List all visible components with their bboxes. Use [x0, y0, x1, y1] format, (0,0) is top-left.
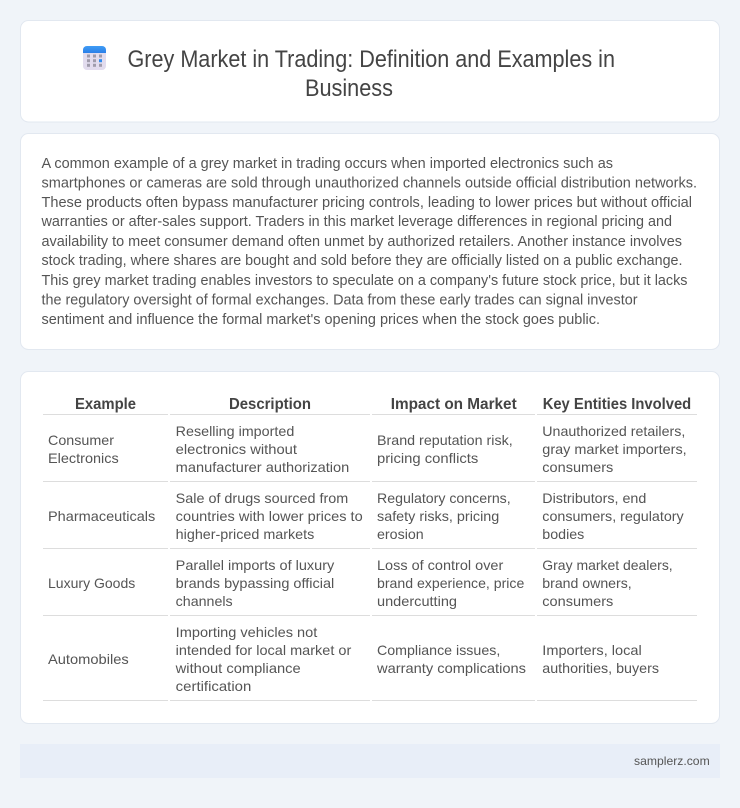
table row: luxury goods: Luxury Goods	[48, 575, 135, 591]
text block: description paragraph: smartphones or cameras are sold through unauthorized channels outside official distribution networks.	[42, 176, 697, 192]
table row: automobiles: Importers, local	[542, 642, 642, 658]
table row: luxury goods	[43, 557, 697, 616]
text block: description paragraph: stock trading, where shares are bought and sold before they are officially listed on a public exchange.	[42, 253, 682, 269]
table row: pharmaceuticals: higher-priced markets	[176, 526, 314, 542]
text block: description paragraph: warranties or after-sales support. Traders in this market leverage differences in regional pricing and	[41, 214, 672, 230]
table row: pharmaceuticals: Regulatory concerns,	[377, 490, 511, 506]
table row: automobiles: warranty complications	[376, 660, 526, 676]
table header row: Example	[75, 396, 136, 413]
table row: luxury goods: consumers	[542, 593, 613, 609]
table row: consumer electronics: electronics without	[176, 441, 297, 457]
table row: luxury goods: channels	[176, 593, 233, 609]
table row: consumer electronics: Reselling imported	[176, 423, 294, 439]
table row: pharmaceuticals: erosion	[377, 526, 424, 542]
table row: luxury goods: Parallel imports of luxury	[176, 557, 334, 573]
text block: description paragraph: sentiment and influence the formal market's opening prices when the stock goes public.	[42, 312, 600, 328]
table row: automobiles: Automobiles	[48, 651, 129, 667]
title: Business	[305, 75, 393, 102]
text block: description paragraph: availability to meet consumer demand often unmet by authorized retailers. Another instance involves	[42, 234, 682, 250]
table row: pharmaceuticals: consumers, regulatory	[542, 508, 684, 524]
table row: luxury goods: brands bypassing official	[176, 575, 334, 591]
table row: consumer electronics: Electronics	[48, 450, 119, 466]
table row: luxury goods: Gray market dealers,	[542, 557, 673, 573]
table header row	[43, 396, 697, 415]
table row: pharmaceuticals	[43, 490, 697, 549]
table row: consumer electronics: Brand reputation risk,	[377, 432, 513, 448]
table row: pharmaceuticals: bodies	[542, 526, 584, 542]
title: Grey Market in Trading: Definition and Examples in	[128, 46, 615, 73]
table row: automobiles: certification	[176, 678, 251, 694]
footer source text: samplerz.com	[634, 754, 710, 768]
panel: description	[20, 134, 720, 350]
table row: pharmaceuticals: Distributors, end	[542, 490, 646, 506]
text block: description paragraph: A common example of a grey market in trading occurs when imported electronics such as	[42, 156, 613, 172]
table row: automobiles: Importing vehicles not	[176, 624, 317, 640]
table row: luxury goods: undercutting	[377, 593, 457, 609]
table row: automobiles: intended for local market or	[176, 642, 352, 658]
table row: luxury goods: brand experience, price	[377, 575, 525, 591]
table row: pharmaceuticals: Pharmaceuticals	[48, 508, 155, 524]
table row: pharmaceuticals: safety risks, pricing	[377, 508, 499, 524]
panel: header	[20, 20, 720, 122]
table row: luxury goods: brand owners,	[542, 575, 632, 591]
icon: calendar	[83, 46, 106, 70]
table row: consumer electronics: gray market importers,	[542, 441, 687, 457]
text block: description paragraph: These products often bypass manufacturer pricing controls, leading to lower prices but without official	[42, 195, 692, 211]
table row: consumer electronics: Consumer	[48, 432, 114, 448]
table row: consumer electronics: manufacturer authorization	[176, 459, 349, 475]
table row: pharmaceuticals: countries with lower prices to	[176, 508, 363, 524]
table row: consumer electronics: Unauthorized retailers,	[542, 423, 685, 439]
table row: automobiles: without compliance	[175, 660, 301, 676]
text block: description paragraph	[41, 156, 697, 328]
table row: automobiles: authorities, buyers	[542, 660, 659, 676]
table row: consumer electronics	[43, 423, 697, 482]
title	[128, 46, 615, 102]
table row: luxury goods: Loss of control over	[377, 557, 504, 573]
panel: examples table	[20, 372, 720, 724]
table row: automobiles	[43, 624, 697, 701]
table row: consumer electronics: consumers	[542, 459, 613, 475]
table header row: Description	[229, 396, 311, 413]
table row: pharmaceuticals: Sale of drugs sourced from	[176, 490, 348, 506]
text block: description paragraph: the regulatory oversight of formal exchanges. Data from these early trades can signal investor	[42, 292, 638, 308]
table header row: Impact on Market	[391, 396, 517, 413]
table row: automobiles: Compliance issues,	[377, 642, 500, 658]
table row: consumer electronics: pricing conflicts	[377, 450, 478, 466]
footer bar	[20, 744, 720, 778]
text block: description paragraph: This grey market trading enables investors to speculate on a company's future stock price, but it lacks	[42, 273, 688, 289]
table header row: Key Entities Involved	[543, 396, 691, 413]
